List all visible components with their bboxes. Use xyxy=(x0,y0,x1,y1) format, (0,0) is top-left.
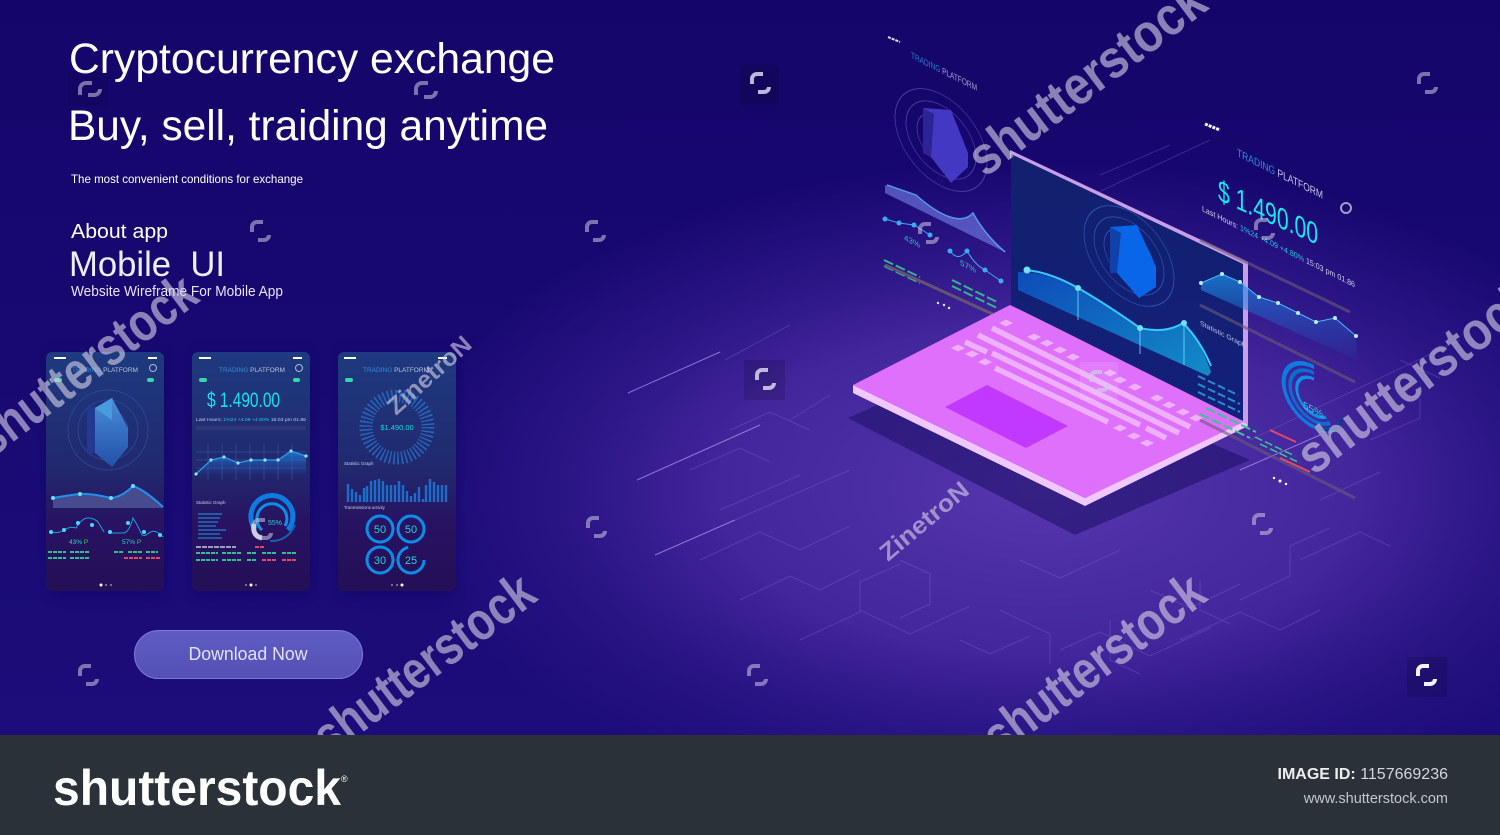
panel percent 57: 57% xyxy=(960,257,976,275)
screen gem xyxy=(1110,225,1156,298)
trading label: TRADING PLATFORM xyxy=(1237,147,1323,202)
phone 2 gear xyxy=(296,364,302,372)
title xyxy=(68,35,555,150)
screen radar xyxy=(1084,188,1174,324)
phone 3 gauge values: 30 xyxy=(374,555,386,567)
phone 2 line chart xyxy=(196,451,306,474)
wireframe caption: Website Wireframe For Mobile App xyxy=(71,284,283,300)
about app: About app xyxy=(71,221,168,243)
panel status row xyxy=(888,37,900,42)
base edge xyxy=(853,385,1248,506)
panel status dots xyxy=(1205,124,1220,130)
phone 2 status bar xyxy=(199,357,211,359)
phone 2 last hours: Last Hours: 1%24 +4.09 +4.80% 15:03 pm 01.86 xyxy=(196,417,307,422)
phone 1 xyxy=(46,352,164,592)
tagline: The most convenient conditions for exchange xyxy=(71,172,303,186)
gear xyxy=(1341,203,1351,213)
download button: Download Now xyxy=(188,644,308,664)
phone 2 tabs xyxy=(199,378,207,382)
watermark tiles xyxy=(68,65,1447,697)
watermarks: ZinetroN xyxy=(382,331,477,420)
phone 1 gear xyxy=(150,364,156,372)
screen area chart xyxy=(1018,272,1211,376)
phone 2 title: TRADING PLATFORM xyxy=(219,367,285,374)
phone 1 status bar xyxy=(54,357,66,359)
phone 1 area chart xyxy=(53,486,163,508)
phone 3 bars xyxy=(348,479,446,502)
watermarks: shutterstock xyxy=(971,561,1217,767)
footer logo mark: ® xyxy=(341,774,348,784)
phone 2 percent: 55% xyxy=(268,520,282,527)
light streaks xyxy=(628,352,1320,555)
phone 2 upper band xyxy=(196,426,306,430)
phone 2 pager xyxy=(245,584,257,586)
footer url: www.shutterstock.com xyxy=(1303,791,1448,807)
phone 1: 57% P xyxy=(122,539,141,546)
phone 1 radar xyxy=(68,390,148,470)
donut xyxy=(1284,352,1342,441)
screen stat text: Statistic Graph xyxy=(1200,318,1246,350)
phone 2 grid xyxy=(196,444,306,480)
panel gem xyxy=(923,108,968,183)
keyboard xyxy=(951,320,1203,446)
phone 3 gauge values: 50 xyxy=(374,524,386,536)
watermark icons xyxy=(80,74,1436,684)
phone 1 pager xyxy=(100,584,112,586)
left floating panel xyxy=(882,37,1010,322)
phone 3 stat label: Statistic Graph xyxy=(344,461,374,466)
pager xyxy=(1273,477,1287,485)
dim rows xyxy=(1200,240,1355,498)
phone 3 transactions label: Transmissions activity xyxy=(344,505,386,510)
phone 2 price: $ 1.490.00 xyxy=(207,389,280,412)
donut percent: 55% xyxy=(1303,400,1324,421)
phone 3 price: $1.490.00 xyxy=(380,423,414,432)
phone 1 tabs xyxy=(54,378,62,382)
panel sparklines xyxy=(885,219,1001,281)
phone 1 title: TRADING PLATFORM xyxy=(72,367,138,374)
phone 2 market rows xyxy=(196,546,236,548)
laptop shadow xyxy=(848,350,1250,535)
image id: IMAGE ID: 1157669236 xyxy=(1278,766,1448,783)
download button xyxy=(134,630,362,678)
panel radar xyxy=(895,71,987,209)
title: Cryptocurrency exchange xyxy=(69,35,555,83)
screen frame xyxy=(1010,150,1248,425)
phone 3 title: TRADING PLATFORM xyxy=(363,367,429,374)
mobile ui: Mobile UI xyxy=(69,245,225,284)
phone 1 market rows xyxy=(48,552,158,558)
footer bar xyxy=(0,735,1500,835)
base deck xyxy=(853,305,1248,498)
phone 3 gauge values: 50 xyxy=(405,524,417,536)
phone 3 gauges xyxy=(367,516,424,573)
panel percent 43: 43% xyxy=(904,232,920,250)
phone 3 tabs xyxy=(345,378,353,382)
phone 3 status bar xyxy=(344,357,356,359)
phone 2 donut xyxy=(251,496,295,541)
footer logo: shutterstock xyxy=(53,760,341,816)
phone 3 radial gauge xyxy=(366,396,428,458)
panel heading: TRADING PLATFORM xyxy=(911,50,977,94)
phone 1 sparklines xyxy=(50,518,163,537)
phone 2 xyxy=(192,352,310,592)
phone 3 gauge values: 25 xyxy=(405,555,417,567)
price: $ 1.490.00 xyxy=(1218,173,1318,252)
market rows xyxy=(1200,408,1256,438)
last hours: Last Hours: 1%24 +4.09 +4.80% 15:03 pm 01.86 xyxy=(1202,203,1355,290)
subtitle: Buy, sell, traiding anytime xyxy=(68,102,548,150)
watermarks: shutterstock xyxy=(301,561,547,767)
phone 3 pager xyxy=(391,584,404,586)
right floating panel xyxy=(1199,124,1358,498)
line chart xyxy=(1201,274,1357,360)
laptop xyxy=(853,150,1248,506)
phone 1 gem xyxy=(95,398,128,467)
phone 3 xyxy=(338,352,456,592)
phone 1 percentages: 43% P xyxy=(69,539,88,546)
circuit board floor lines xyxy=(690,140,1460,674)
phone 2 statistic: Statistic Graph xyxy=(196,500,226,505)
screen xyxy=(1011,154,1243,421)
phone 3 gauge values xyxy=(374,524,417,567)
watermarks: ZinetroN xyxy=(875,476,975,567)
panel area chart xyxy=(885,185,1005,252)
trackpad xyxy=(945,385,1068,448)
